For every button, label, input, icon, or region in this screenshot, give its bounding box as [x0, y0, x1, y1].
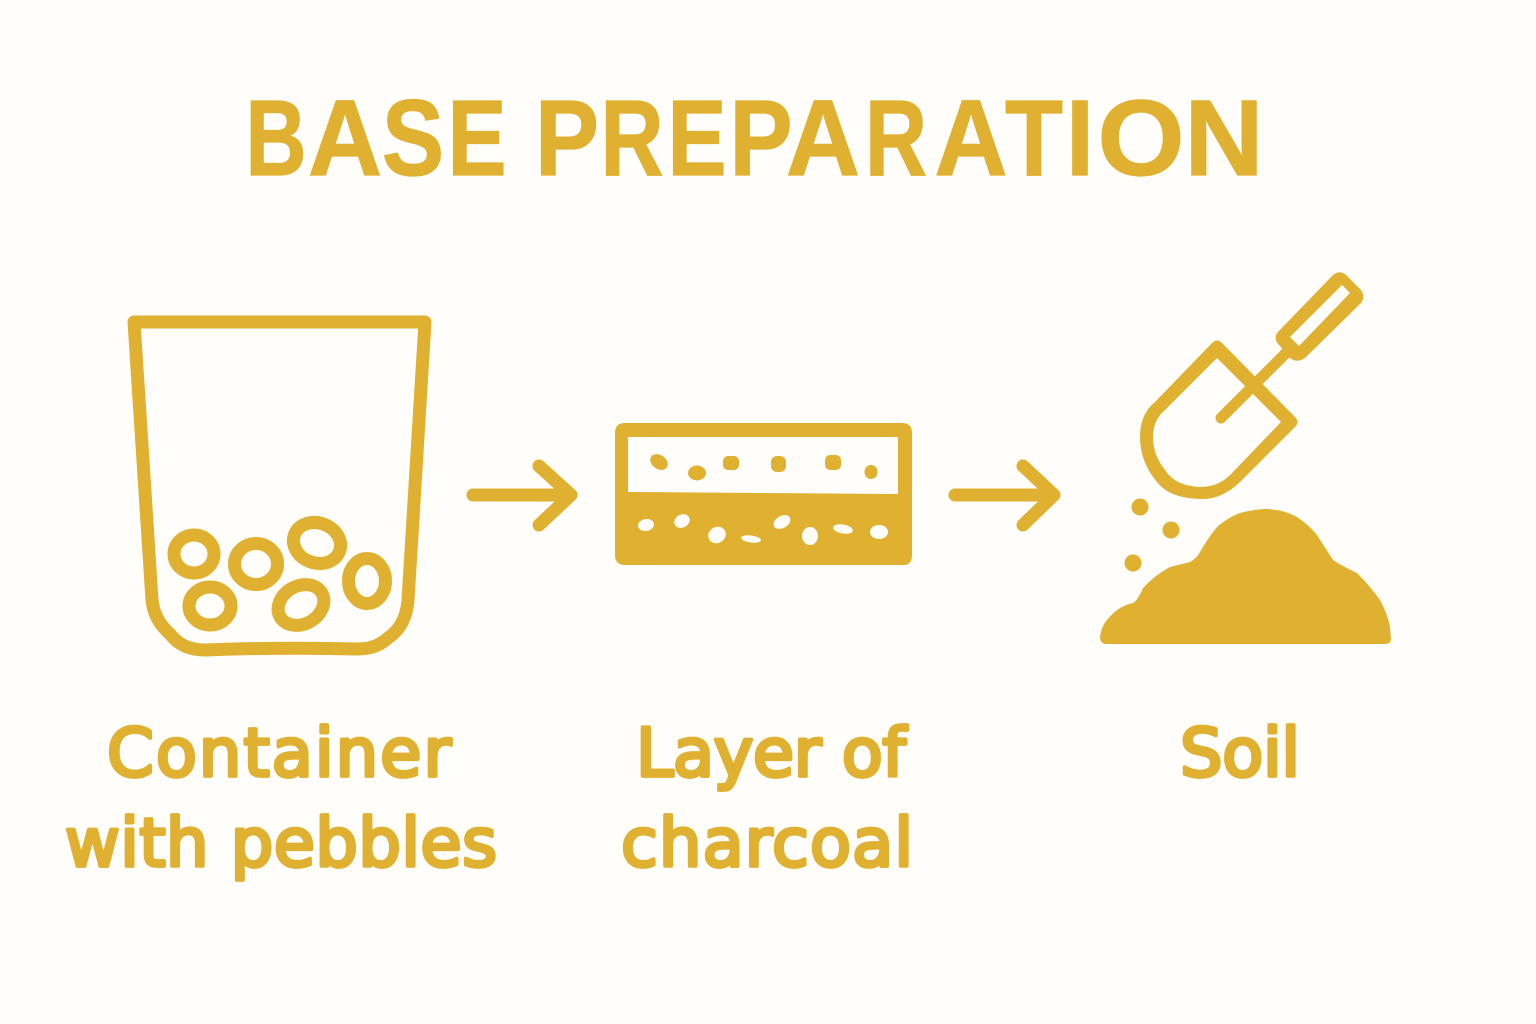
title: A	[786, 77, 860, 198]
title: S	[382, 77, 444, 198]
title: R	[600, 77, 664, 198]
label: layer of charcoal: Layer of	[636, 714, 907, 792]
title: P	[730, 77, 792, 198]
title: O	[1098, 77, 1184, 198]
label: container with pebbles	[65, 714, 497, 882]
icon: trowel and soil	[1100, 272, 1391, 644]
label: container with pebbles: with pebbles	[65, 804, 497, 882]
trowel blade	[1140, 340, 1298, 499]
icon: container with pebbles	[134, 322, 425, 650]
soil pile	[1100, 509, 1391, 644]
title: N	[1184, 77, 1264, 198]
label: soil: Soil	[1180, 714, 1300, 792]
title: A	[934, 77, 1008, 198]
icon: charcoal layer	[615, 423, 912, 565]
label: layer of charcoal: charcoal	[621, 804, 913, 882]
soil grains	[1124, 498, 1180, 572]
title: B	[246, 77, 306, 198]
title: E	[448, 77, 506, 198]
trowel shaft	[1221, 352, 1287, 418]
label: container with pebbles: Container	[107, 714, 451, 792]
title: P	[535, 77, 599, 198]
arrow: container to charcoal	[473, 466, 571, 525]
title: T	[1005, 77, 1063, 198]
label: layer of charcoal	[621, 714, 913, 882]
title: I	[1066, 77, 1094, 198]
title: A	[308, 77, 382, 198]
title: E	[668, 77, 726, 198]
trowel handle	[1276, 272, 1363, 361]
arrow: charcoal to soil	[955, 466, 1054, 525]
title: R	[865, 77, 927, 198]
